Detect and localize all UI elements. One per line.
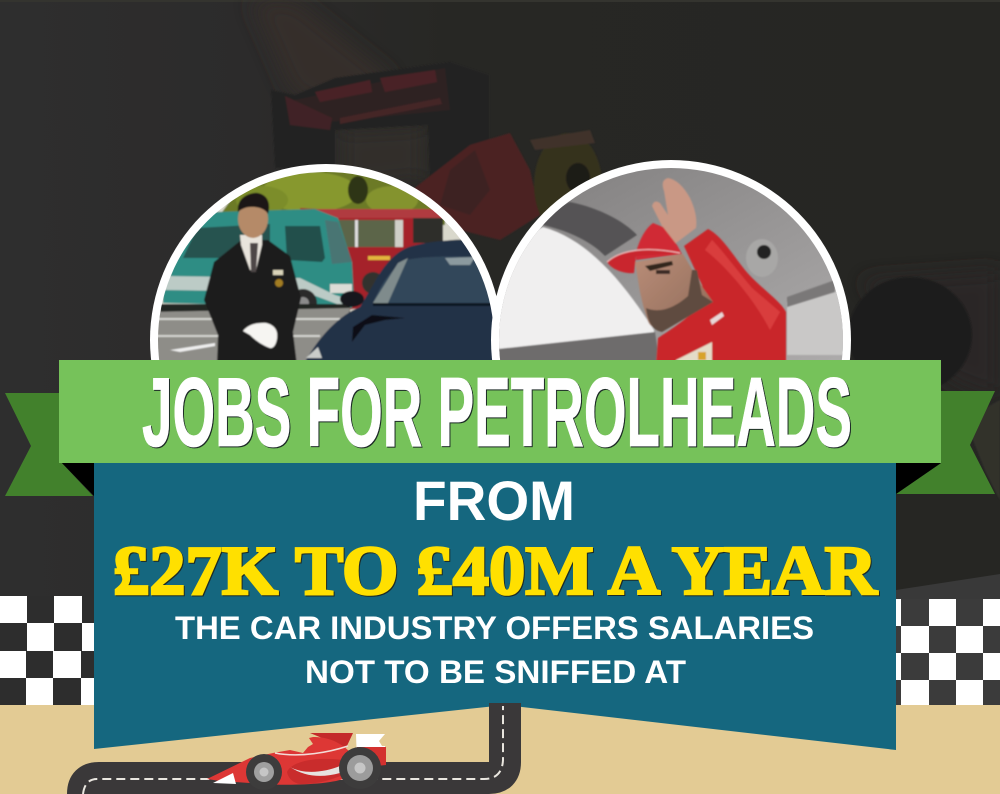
left chequered flag bbox=[0, 596, 94, 705]
photo: racing driver in circle bbox=[491, 160, 851, 360]
icon: red racing car bbox=[207, 733, 386, 790]
subtitle: from: FROM bbox=[413, 469, 575, 532]
red bus bbox=[300, 207, 426, 310]
ground bbox=[0, 705, 1000, 794]
dark sedan bbox=[305, 239, 500, 365]
pavement bbox=[150, 308, 350, 365]
face bbox=[635, 254, 713, 331]
man bbox=[204, 240, 301, 365]
teal panel bbox=[94, 462, 896, 750]
road track bbox=[83, 703, 505, 794]
ribbon: left tail bbox=[5, 393, 94, 496]
ribbon: right tail bbox=[896, 391, 995, 494]
salary range: £27K TO £40M A YEAR bbox=[113, 533, 878, 610]
green title banner bbox=[59, 360, 941, 463]
race suit bbox=[656, 229, 786, 365]
green bus bbox=[163, 209, 354, 308]
strapline line 2: NOT TO BE SNIFFED AT bbox=[305, 654, 686, 690]
cap bbox=[636, 223, 682, 260]
photo: chauffeur in circle bbox=[150, 164, 496, 360]
right chequered flag bbox=[896, 599, 1000, 705]
strapline line 1: THE CAR INDUSTRY OFFERS SALARIES bbox=[175, 610, 814, 646]
hand bbox=[652, 178, 696, 246]
